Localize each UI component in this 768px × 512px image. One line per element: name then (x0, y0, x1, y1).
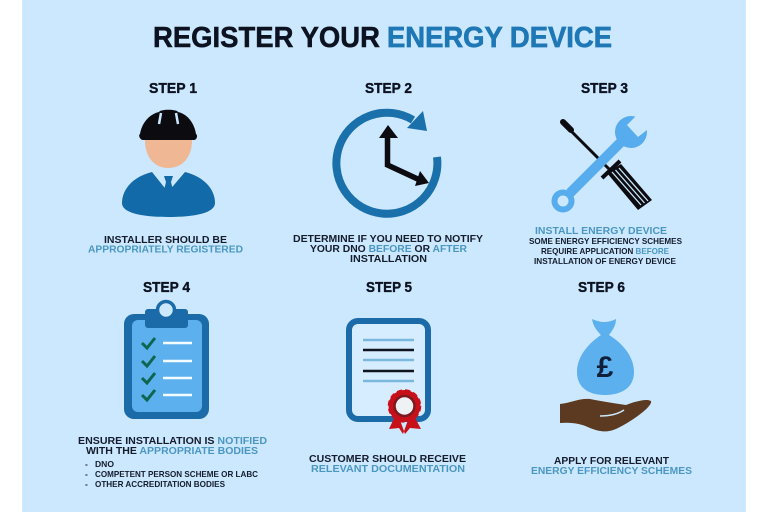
step 2 caption: DETERMINE IF YOU NEED TO NOTIFY (293, 233, 483, 245)
step 4 list: COMPETENT PERSON SCHEME OR LABC (95, 469, 258, 479)
step 3 heading: STEP 3 (581, 81, 628, 97)
step 4 caption: ENSURE INSTALLATION IS NOTIFIED (78, 435, 267, 447)
step 3 caption: INSTALL ENERGY DEVICE (535, 225, 667, 237)
icon: money bag above hand: £ (597, 351, 614, 384)
step 1 caption (88, 234, 243, 256)
step 4 list: OTHER ACCREDITATION BODIES (95, 479, 225, 489)
panel: step 3 (529, 81, 682, 266)
panel: step 5 (309, 280, 466, 475)
title: ENERGY DEVICE (387, 22, 612, 54)
step 4 caption (78, 435, 267, 457)
panel: step 4 (78, 280, 267, 489)
icon: money bag above hand (560, 319, 651, 431)
step 5 caption: RELEVANT DOCUMENTATION (311, 463, 465, 475)
step 4 list: DNO (95, 459, 114, 469)
title (153, 22, 612, 54)
step 4 list (85, 459, 258, 489)
step 6 heading: STEP 6 (578, 280, 625, 296)
step 4 caption: WITH THE APPROPRIATE BODIES (86, 445, 258, 457)
step 3 caption: SOME ENERGY EFFICIENCY SCHEMES (529, 236, 682, 246)
step 4 list: - (85, 479, 88, 489)
icon: clock with arrow (336, 111, 437, 214)
step 4 list: - (85, 469, 88, 479)
step 1 heading: STEP 1 (149, 81, 197, 97)
step 2 caption (293, 233, 483, 265)
icon: crossed wrench and screwdriver (554, 113, 652, 210)
step 3 caption: REQUIRE APPLICATION BEFORE (541, 246, 669, 256)
step 6 caption (531, 455, 692, 477)
step 4 heading: STEP 4 (143, 280, 190, 296)
step 2 caption: YOUR DNO BEFORE OR AFTER (310, 243, 467, 255)
title: REGISTER YOUR (153, 22, 380, 54)
step 5 heading: STEP 5 (366, 280, 412, 296)
icon: installer with hard hat (122, 110, 215, 217)
step 6 caption: APPLY FOR RELEVANT (554, 455, 670, 467)
panel: step 1 (88, 81, 243, 256)
icon: certificate with rosette (349, 321, 428, 434)
icon: clipboard checklist (124, 302, 209, 419)
step 1 caption: APPROPRIATELY REGISTERED (88, 244, 243, 256)
panel: step 6 (531, 280, 692, 477)
step 5 caption (309, 453, 466, 475)
step 3 caption: INSTALLATION OF ENERGY DEVICE (534, 256, 676, 266)
step 6 caption: ENERGY EFFICIENCY SCHEMES (531, 465, 692, 477)
step 2 heading: STEP 2 (365, 81, 412, 97)
step 3 caption (529, 225, 682, 266)
step 1 caption: INSTALLER SHOULD BE (104, 234, 227, 246)
step 5 caption: CUSTOMER SHOULD RECEIVE (309, 453, 466, 465)
step 4 list: - (85, 459, 88, 469)
step 2 caption: INSTALLATION (350, 253, 427, 265)
panel: step 2 (293, 81, 483, 265)
